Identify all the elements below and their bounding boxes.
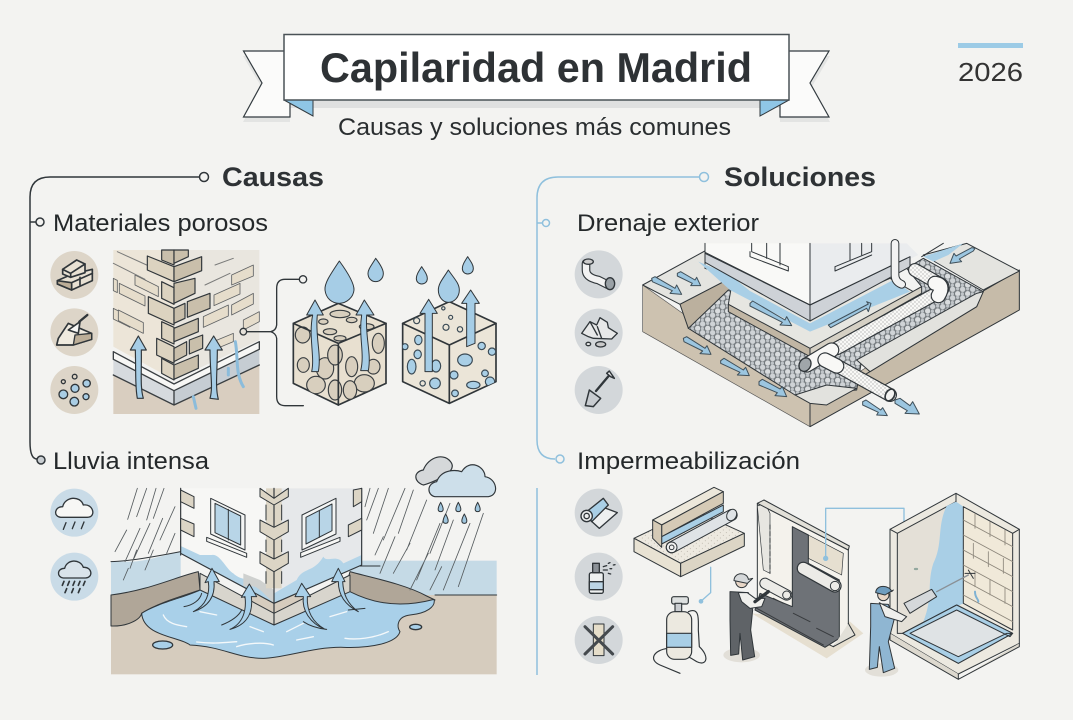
year marker: [958, 43, 1023, 87]
panel: lluvia intensa: [50, 457, 497, 674]
connector: causas: [30, 172, 208, 464]
subtitle: Causas y soluciones más comunes: [338, 114, 731, 141]
icon: bricks: [50, 251, 98, 299]
illustration: brick wall with rising damp: [113, 250, 259, 414]
icon: pipe elbow: [575, 250, 623, 298]
heading: materiales porosos: Materiales porosos: [53, 210, 268, 237]
heading: causas: Causas: [222, 162, 324, 192]
connector: detail lines: [824, 508, 906, 560]
heading: lluvia intensa: Lluvia intensa: [53, 448, 210, 475]
panel: materiales porosos: [50, 250, 496, 414]
icon: trowel: [50, 308, 98, 356]
illustration: wall with membrane: [752, 500, 863, 658]
icon: rain clouds: [416, 457, 496, 523]
heading: Capilaridad en Madrid: [320, 44, 752, 91]
heading: soluciones: Soluciones: [724, 162, 876, 192]
illustration: flooded building: [111, 488, 497, 674]
icon: crossed wall: [575, 616, 623, 664]
illustration: membrane materials: [634, 487, 744, 577]
icon: stones: [575, 309, 623, 357]
title banner: [243, 34, 830, 122]
heading: drenaje exterior: Drenaje exterior: [577, 210, 759, 237]
icon: cloud heavy rain: [50, 553, 98, 601]
illustration: cube small pores: [402, 257, 496, 403]
illustration: cube large pores: [293, 258, 386, 405]
illustration: perimeter drain: [643, 243, 1019, 427]
icon: cloud light rain: [50, 489, 98, 537]
icon: spray bottle: [575, 553, 623, 601]
illustration: interior room: [890, 493, 1019, 679]
connector: soluciones: [537, 172, 708, 675]
bracket connector: [247, 279, 303, 406]
heading: impermeabilización: Impermeabilización: [577, 448, 800, 475]
figure: worker with roller: [723, 574, 768, 662]
connector: sprayer: [699, 567, 711, 603]
icon: pores: [50, 366, 98, 414]
panel: drenaje exterior: [575, 243, 1019, 427]
panel: impermeabilización: [575, 487, 1019, 679]
icon: membrane roll: [575, 489, 623, 537]
year marker: 2026: [958, 57, 1023, 87]
icon: pressure sprayer: [654, 597, 706, 673]
figure: worker with sealant gun: [865, 570, 975, 677]
icon: shovel: [575, 366, 623, 414]
